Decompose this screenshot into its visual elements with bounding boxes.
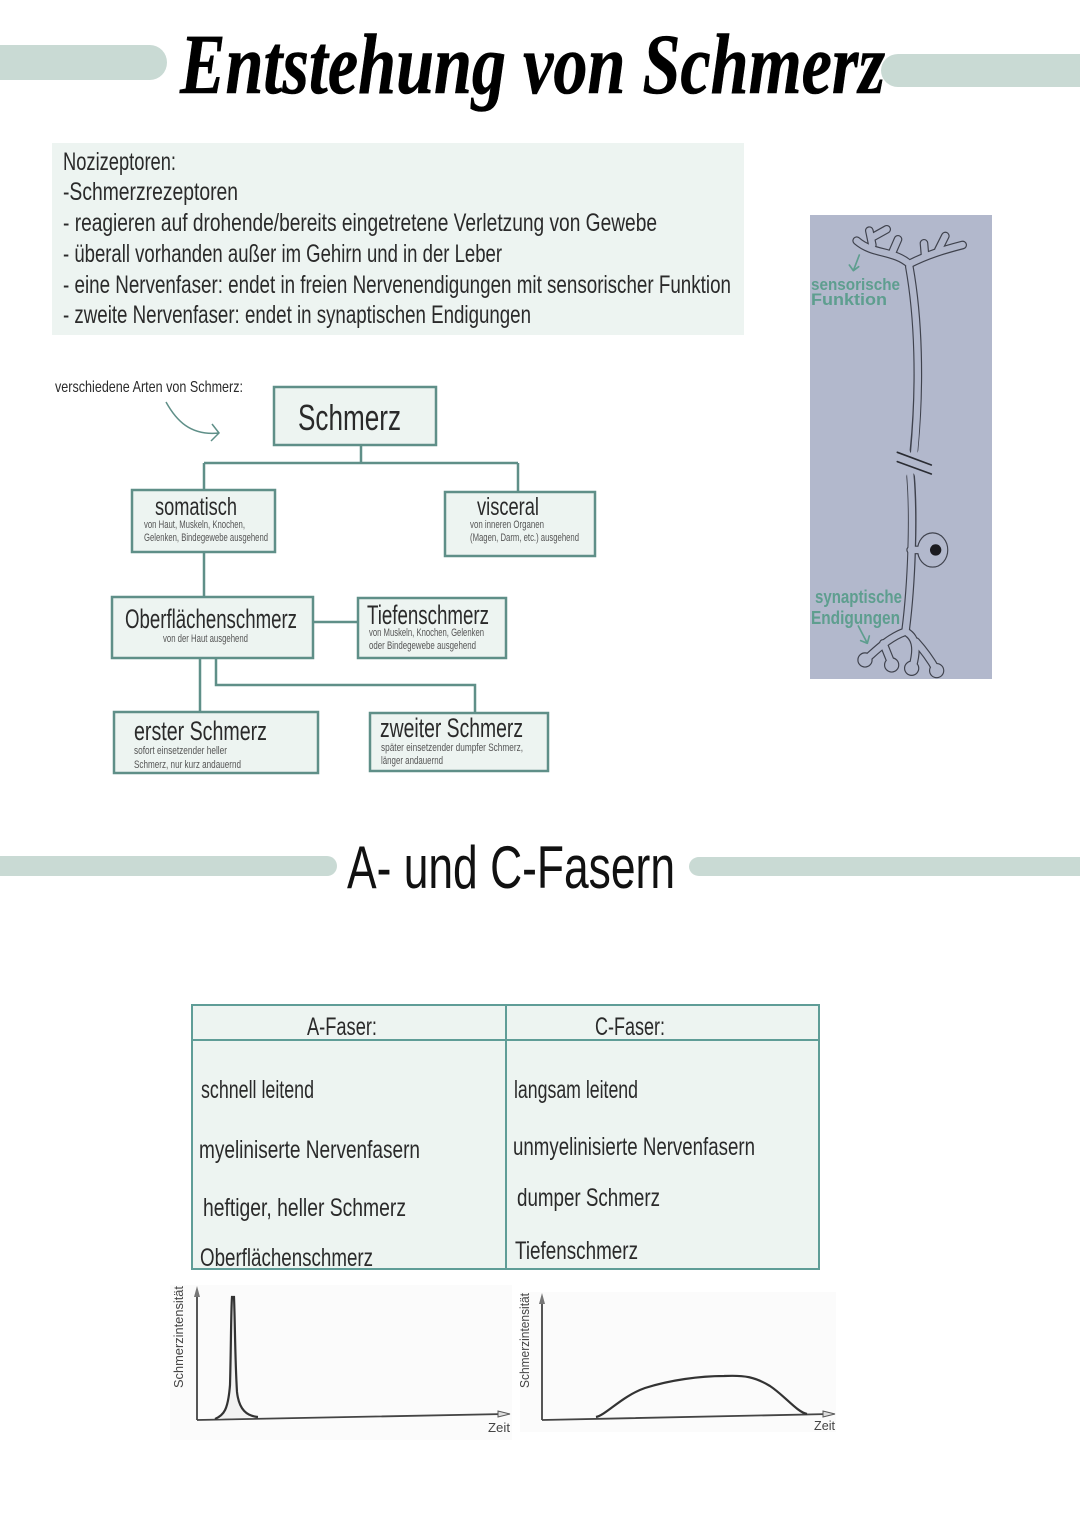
text: definition lines: Nozizeptoren: [63, 148, 176, 176]
box: Schmerz: Schmerz [298, 397, 401, 438]
chart: A-Faser pain curve [170, 1285, 512, 1440]
caption: verschiedene Arten von Schmerz: verschiedene Arten von Schmerz: [55, 379, 243, 396]
box: erster Schmerz [114, 712, 318, 773]
label: synaptische Endigungen: synaptische [815, 587, 902, 607]
box: visceral [445, 492, 595, 556]
chart: A-Faser pain curve: Zeit [488, 1421, 511, 1435]
label: synaptische Endigungen: Endigungen [811, 608, 900, 628]
box: Oberflächenschmerz [112, 597, 313, 658]
box: Tiefenschmerz: Tiefenschmerz [367, 600, 489, 630]
column: A-Faser: myeliniserte Nervenfasern [199, 1136, 420, 1164]
neuron drawing panel [810, 215, 992, 679]
text: definition lines: - eine Nervenfaser: endet in freien Nervenendigungen mit sensorischer Funktion [63, 271, 731, 299]
chart: C-Faser pain curve: Schmerzintensität [517, 1293, 532, 1388]
title: Entstehung von Schmerz [179, 16, 885, 112]
text: definition lines: - überall vorhanden außer im Gehirn und in der Leber [63, 240, 502, 268]
box: Tiefenschmerz: von Muskeln, Knochen, Gelenken [369, 627, 484, 639]
header bar left [0, 45, 167, 80]
arrow: caption to diagram [166, 402, 219, 441]
panel: Nozizeptoren [52, 143, 744, 335]
box: somatisch: somatisch [155, 493, 237, 521]
box: Schmerz [274, 387, 436, 445]
box: visceral: (Magen, Darm, etc.) ausgehend [470, 532, 579, 544]
box: erster Schmerz: Schmerz, nur kurz andauernd [134, 759, 241, 771]
column: C-Faser: C-Faser: [595, 1013, 665, 1041]
tree diagram: types of pain [112, 387, 595, 773]
column: A-Faser [199, 1013, 420, 1272]
box: zweiter Schmerz: zweiter Schmerz [380, 713, 523, 743]
box: somatisch [132, 490, 275, 552]
chart: C-Faser pain curve [517, 1292, 836, 1433]
column: C-Faser: dumper Schmerz [517, 1184, 660, 1212]
column: A-Faser: schnell leitend [201, 1076, 314, 1104]
box: zweiter Schmerz: länger andauernd [381, 755, 443, 767]
column: A-Faser: Oberflächenschmerz [200, 1244, 373, 1272]
text: definition lines: - zweite Nervenfaser: endet in synaptischen Endigungen [63, 301, 531, 329]
text: definition lines: - reagieren auf drohende/bereits eingetretene Verletzung von Gewebe [63, 209, 657, 237]
box: zweiter Schmerz: später einsetzender dumpfer Schmerz, [381, 742, 523, 754]
box: somatisch: von Haut, Muskeln, Knochen, [144, 519, 245, 531]
box: erster Schmerz: sofort einsetzender heller [134, 745, 227, 757]
box: Oberflächenschmerz: von der Haut ausgehend [163, 633, 248, 645]
column: C-Faser: unmyelinisierte Nervenfasern [513, 1133, 755, 1161]
column: A-Faser: A-Faser: [307, 1013, 377, 1041]
icon: neuron [849, 229, 963, 674]
column: A-Faser: heftiger, heller Schmerz [203, 1194, 406, 1222]
section heading: A- und C-Fasern [347, 834, 675, 901]
box: erster Schmerz: erster Schmerz [134, 716, 267, 746]
box: visceral: von inneren Organen [470, 519, 544, 531]
column: C-Faser: langsam leitend [514, 1076, 638, 1104]
box: Tiefenschmerz: oder Bindegewebe ausgehend [369, 640, 476, 652]
label: sensorische Funktion [811, 275, 900, 309]
label: sensorische Funktion: sensorische [811, 275, 900, 294]
box: somatisch: Gelenken, Bindegewebe ausgehend [144, 532, 268, 544]
text: definition lines: -Schmerzrezeptoren [63, 178, 238, 206]
header bar right [881, 54, 1080, 87]
box: Tiefenschmerz [358, 598, 506, 658]
table: A-Faser vs C-Faser [192, 1005, 819, 1272]
column: C-Faser: Tiefenschmerz [515, 1237, 638, 1265]
section bar right [689, 857, 1080, 876]
text: definition lines [63, 148, 731, 329]
box: zweiter Schmerz [370, 713, 548, 771]
column: C-Faser [513, 1013, 755, 1265]
box: visceral: visceral [477, 493, 539, 521]
box: Oberflächenschmerz: Oberflächenschmerz [125, 604, 297, 634]
chart: A-Faser pain curve: Schmerzintensität [171, 1286, 186, 1388]
section bar left [0, 856, 337, 876]
label: synaptische Endigungen [811, 587, 902, 628]
label: sensorische Funktion: Funktion [811, 290, 887, 309]
chart: C-Faser pain curve: Zeit [814, 1419, 836, 1433]
